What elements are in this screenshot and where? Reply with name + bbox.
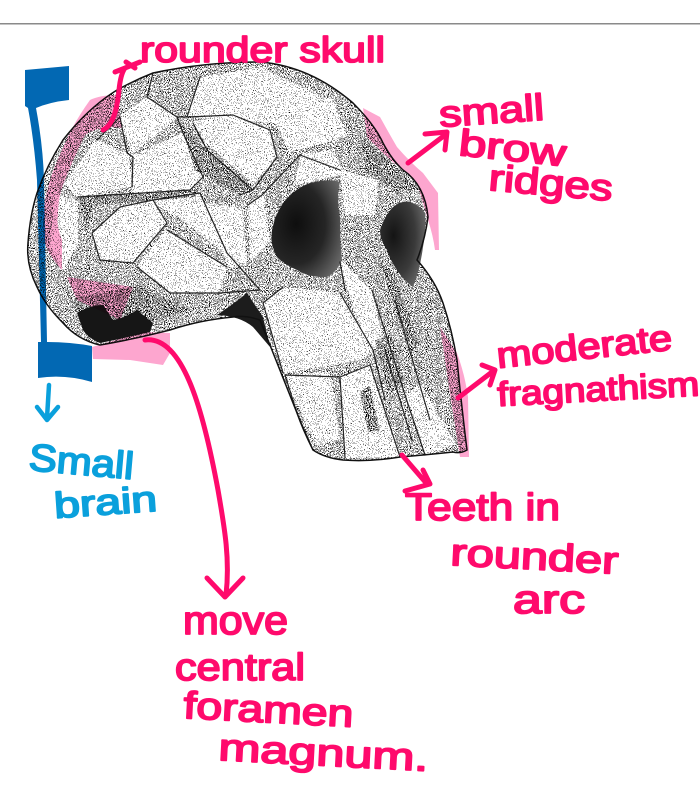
label: more central foramen magnum: foramen xyxy=(183,685,354,736)
pink highlight: rounder skull crescent xyxy=(43,95,122,270)
label: teeth in rounder arc: rounder xyxy=(450,532,620,583)
label: more central foramen magnum xyxy=(175,599,429,780)
label: more central foramen magnum: central xyxy=(175,647,305,689)
pink highlight: occipital base xyxy=(67,277,133,320)
skull base shadow xyxy=(77,305,153,343)
arrow: foramen magnum xyxy=(145,340,243,597)
label: teeth in rounder arc: arc xyxy=(513,578,585,622)
pink highlight: jaw profile xyxy=(440,327,469,457)
label: moderate prognathism xyxy=(495,317,700,414)
label: small brain: Small xyxy=(27,437,135,488)
arrow: brow ridges xyxy=(408,132,447,163)
darker stipple bands xyxy=(70,123,420,432)
fracture lines xyxy=(78,73,430,458)
top rule xyxy=(0,23,700,24)
right eye socket xyxy=(380,202,425,287)
neck shadow xyxy=(217,293,270,347)
skull outline xyxy=(28,62,467,461)
label: small brain: brain xyxy=(53,478,158,526)
blue bracket: brain height xyxy=(25,66,92,382)
arrow: rounder skull xyxy=(103,62,140,130)
label: moderate prognathism: moderate xyxy=(495,317,674,376)
label: moderate prognathism: fragnathism xyxy=(496,365,700,414)
label: small brow ridges: small xyxy=(438,87,545,135)
arrow: small brain xyxy=(37,385,58,420)
arrow: prognathism xyxy=(458,365,495,398)
arrow: teeth xyxy=(402,455,430,491)
light cranial and facial plates xyxy=(52,69,453,456)
label: small brow ridges: brow xyxy=(457,122,568,174)
label: teeth in rounder arc: Teeth in xyxy=(405,487,560,529)
left eye socket xyxy=(272,180,342,277)
pink highlight: brow ridge xyxy=(363,108,439,250)
skull illustration xyxy=(28,62,467,461)
skull base stipple xyxy=(28,62,467,461)
label: teeth in rounder arc xyxy=(405,487,620,622)
label: small brain xyxy=(27,437,158,526)
label: more central foramen magnum: magnum. xyxy=(218,727,429,780)
label: small brow ridges xyxy=(438,87,614,209)
pink highlight: under skull xyxy=(92,332,170,365)
label: rounder skull: rounder skull xyxy=(140,29,385,70)
label: small brow ridges: ridges xyxy=(487,157,614,209)
label: more central foramen magnum: move xyxy=(183,599,288,643)
